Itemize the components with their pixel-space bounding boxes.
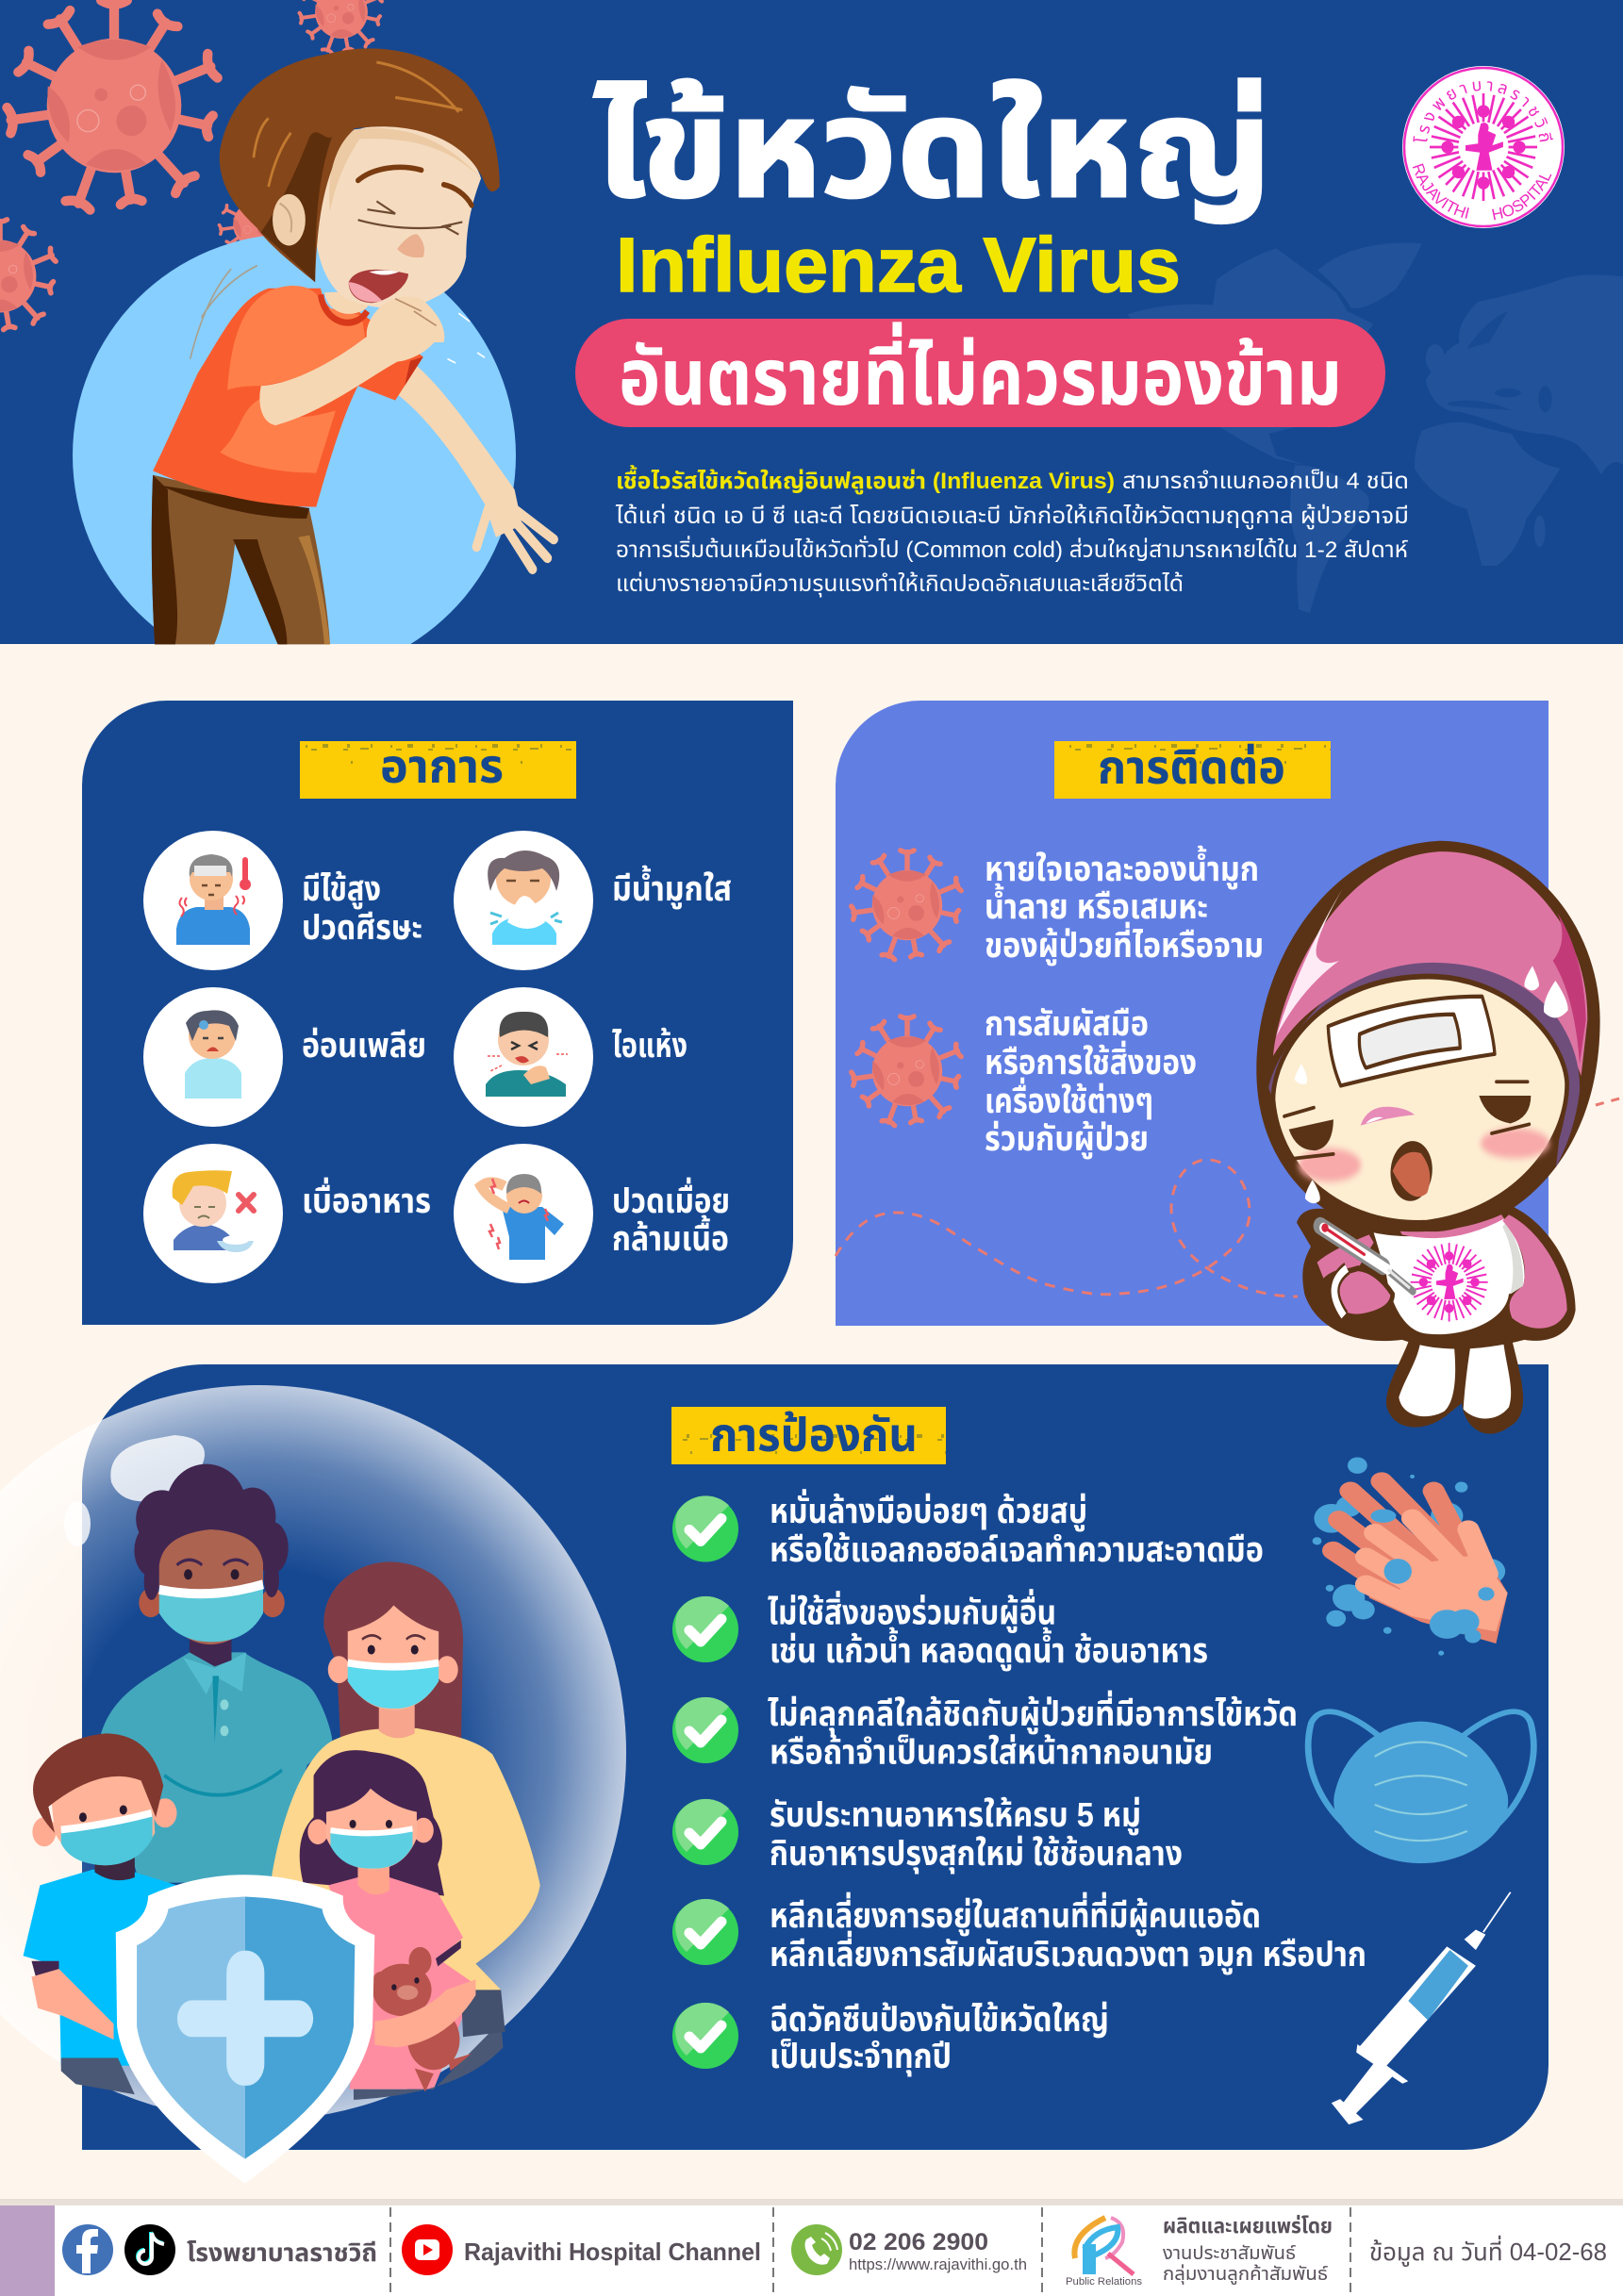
symptom: fatigue (143, 987, 426, 1127)
heading: prevention: การป้องกัน (710, 1409, 918, 1462)
check item 5 (672, 1891, 1366, 1974)
text: droplet transmission (985, 845, 1264, 966)
body (1297, 1205, 1576, 1349)
check item 3: ไม่คลุกคลีใกล้ชิดกับผู้ป่วยที่มีอาการไข้หวัด (768, 1690, 1298, 1734)
producer credit: งานประชาสัมพันธ์ (1163, 2243, 1296, 2264)
phone number: 02 206 2900 (849, 2229, 988, 2255)
label (302, 869, 422, 947)
public relations logo (1066, 2218, 1143, 2288)
head (1256, 841, 1600, 1231)
father (101, 1464, 333, 1883)
intro paragraph: ได้แก่ ชนิด เอ บี ซี และดี โดยชนิดเอและบี มักก่อให้เกิดไข้หวัดตามฤดูกาล ผู้ป่วยอาจมี (615, 503, 1409, 530)
virus cluster (0, 0, 382, 333)
panel: prevention (0, 1364, 1548, 2184)
pill banner: อันตรายที่ไม่ควรมองข้าม (619, 322, 1342, 421)
icon: phone (791, 2224, 842, 2275)
check item 2: ไม่ใช้สิ่งของร่วมกับผู้อื่น (768, 1588, 1056, 1633)
check item 2: เช่น แก้วน้ำ หลอดดูดน้ำ ช้อนอาหาร (770, 1627, 1208, 1671)
label: มีน้ำมูกใส (612, 865, 732, 909)
intro paragraph: แต่บางรายอาจมีความรุนแรงทำให้เกิดปอดอักเสบและเสียชีวิตได้ (616, 570, 1184, 598)
check item 4: รับประทานอาหารให้ครบ 5 หมู่ (770, 1795, 1141, 1835)
text: contact transmission: หรือการใช้สิ่งของ (985, 1040, 1197, 1082)
hospital logo: RAJAVITHI HOSPITAL (1413, 163, 1552, 221)
virus icon: droplets (852, 851, 961, 960)
heading: symptoms (300, 740, 576, 799)
teddy bear (373, 1947, 472, 2092)
label (612, 1177, 730, 1258)
check item 6: เป็นประจำทุกปี (770, 2037, 952, 2076)
text: droplet transmission: ของผู้ป่วยที่ไอหรือจาม (985, 921, 1264, 966)
check item 1 (672, 1488, 1264, 1569)
symptom: dry cough (454, 987, 687, 1127)
icon: syringe (1332, 1892, 1511, 2124)
legs (1386, 1334, 1523, 1434)
protective bubble (0, 1385, 626, 2121)
check item 6: ฉีดวัคซีนป้องกันไข้หวัดใหญ่ (770, 2000, 1109, 2039)
dashed flight path (836, 1160, 1298, 1297)
icon: tiktok (124, 2224, 175, 2275)
mother (272, 1561, 540, 2006)
check item 6 (672, 2000, 1109, 2076)
text: contact transmission: เครื่องใช้ต่างๆ (985, 1077, 1153, 1120)
producer credit: กลุ่มงานลูกค้าสัมพันธ์ (1163, 2263, 1328, 2286)
illustration: masked family (24, 1464, 540, 2100)
virus icon: contact (852, 1016, 961, 1126)
symptom: loss of appetite (143, 1144, 431, 1283)
text: droplet transmission: หายใจเอาละอองน้ำมูก (985, 845, 1259, 889)
label: อ่อนเพลีย (302, 1026, 426, 1065)
girl (300, 1750, 505, 2100)
icon: youtube (402, 2224, 453, 2275)
light blue circle behind boy (73, 234, 516, 677)
text: droplet transmission: น้ำลาย หรือเสมหะ (985, 883, 1208, 926)
intro paragraph (615, 465, 1409, 598)
producer credit (1163, 2214, 1333, 2286)
mascot: sick character with thermometer (1256, 841, 1600, 1434)
sweat drops (1524, 966, 1568, 1017)
data date: ข้อมูล ณ วันที่ 04-02-68 (1369, 2235, 1607, 2267)
website: https://www.rajavithi.go.th (849, 2255, 1027, 2273)
label: ปวดศีรษะ (302, 908, 422, 947)
bubble highlight (64, 1435, 205, 1546)
public relations logo: Public Relations (1066, 2276, 1143, 2288)
symptom: runny nose (454, 831, 732, 970)
intro paragraph: เชื้อไวรัสไข้หวัดใหญ่อินฟลูเอนซ่า (Influenza Virus) (616, 465, 1115, 495)
boy (24, 1733, 176, 2094)
producer credit: ผลิตและเผยแพร่โดย (1163, 2214, 1333, 2238)
check item 4 (672, 1795, 1183, 1874)
illustration: coughing boy (152, 48, 554, 644)
label: กล้ามเนื้อ (612, 1214, 729, 1258)
label: มีไข้สูง (302, 869, 381, 909)
icon: facebook (62, 2224, 113, 2275)
text: contact transmission (985, 1004, 1197, 1159)
intro paragraph: สามารถจำแนกออกเป็น 4 ชนิด (1122, 469, 1409, 494)
heading: symptoms: อาการ (380, 740, 504, 793)
label: ปวดเมื่อย (612, 1177, 730, 1220)
label: เบื่ออาหาร (302, 1177, 431, 1220)
check item 5: หลีกเลี่ยงการสัมผัสบริเวณดวงตา จมูก หรือปาก (770, 1930, 1366, 1974)
check item 4: กินอาหารปรุงสุกใหม่ ใช้ช้อนกลาง (770, 1834, 1183, 1874)
panel: transmission (836, 701, 1548, 1326)
icon: face mask (1308, 1711, 1533, 1863)
header banner (0, 0, 1623, 645)
check item 3 (672, 1690, 1298, 1771)
check item 3: หรือถ้าจำเป็นควรใส่หน้ากากอนามัย (770, 1733, 1213, 1771)
text: contact transmission: ร่วมกับผู้ป่วย (985, 1119, 1149, 1159)
youtube label: Rajavithi Hospital Channel (464, 2238, 761, 2266)
hospital logo: โรงพยาบาลราชวิถี (1413, 81, 1553, 141)
dashed trail right of mascot (1596, 1098, 1623, 1105)
panel: symptoms (82, 701, 793, 1325)
check item 2 (672, 1588, 1208, 1671)
label: ไอแห้ง (612, 1026, 687, 1065)
heading: transmission: การติดต่อ (1098, 741, 1285, 794)
symptom: high fever and headache (143, 831, 422, 970)
text: contact transmission: การสัมผัสมือ (985, 1004, 1149, 1043)
forehead patch (1328, 997, 1495, 1085)
icon: hand washing (1313, 1458, 1508, 1656)
thermometer (1320, 1224, 1413, 1292)
footer bar (0, 2199, 1623, 2296)
facebook label: โรงพยาบาลราชวิถี (187, 2238, 377, 2267)
hospital logo (1402, 66, 1565, 228)
face (1284, 1064, 1531, 1206)
symptom: muscle aches (454, 1144, 730, 1283)
intro paragraph: อาการเริ่มต้นเหมือนไข้หวัดทั่วไป (Common cold) ส่วนใหญ่สามารถหายได้ใน 1-2 สัปดาห์ (616, 535, 1409, 563)
shield with cross (116, 1875, 374, 2184)
title: ไข้หวัดใหญ่ (594, 72, 1272, 225)
subtitle: Influenza Virus (616, 223, 1181, 308)
check item 1: หรือใช้แอลกอฮอล์เจลทำความสะอาดมือ (770, 1530, 1264, 1569)
check item 1: หมั่นล้างมือบ่อยๆ ด้วยสบู่ (770, 1488, 1087, 1531)
check item 5: หลีกเลี่ยงการอยู่ในสถานที่ที่มีผู้คนแออัด (770, 1891, 1261, 1936)
world map background (1127, 243, 1623, 613)
heading: transmission (1054, 741, 1331, 799)
